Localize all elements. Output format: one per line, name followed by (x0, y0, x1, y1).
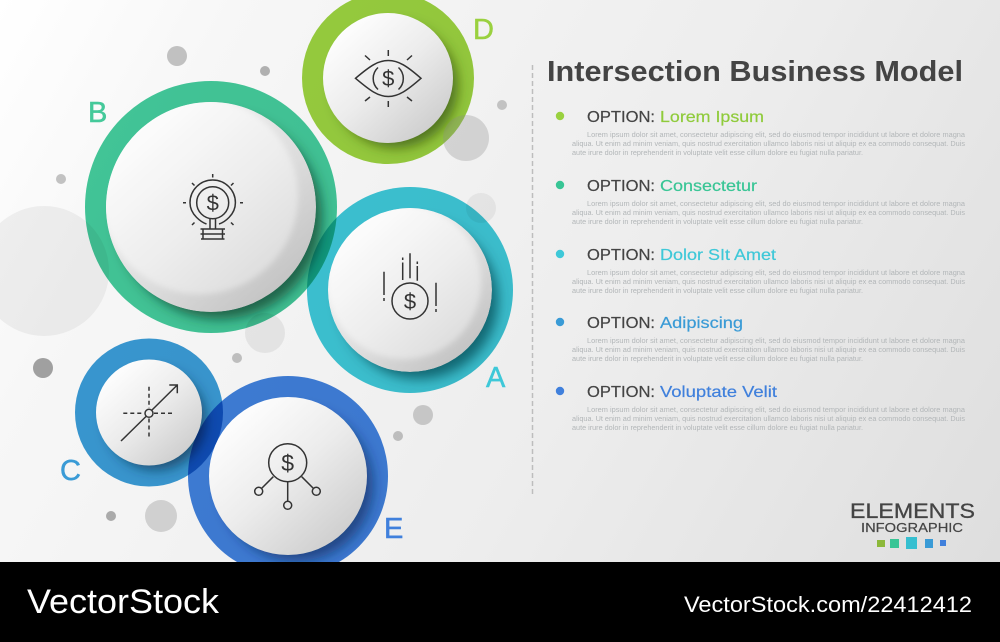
ring B (85, 81, 337, 333)
option: Voluptate Velit (556, 384, 966, 432)
option: Voluptate Velit: Lorem ipsum dolor sit amet, consectetur adipiscing elit, sed do eiusmod tempor incididunt ut labore et dolore magna (587, 407, 965, 414)
panel: circle A (307, 187, 513, 393)
option: Lorem Ipsum: aute irure dolor in reprehenderit in voluptate velit esse cillum dolore eu fugiat nulla pariatur. (572, 150, 863, 157)
ring E (188, 376, 388, 576)
icon: eye with dollar: $ (382, 66, 394, 91)
panel: circle C (75, 338, 223, 486)
option: Dolor Sit Amet: aute irure dolor in reprehenderit in voluptate velit esse cillum dolore eu fugiat nulla pariatur. (572, 288, 863, 295)
letter label E: E (384, 513, 403, 545)
icon: coin network: $ (281, 450, 294, 476)
option: Consectetur: Consectetur (660, 178, 758, 195)
decorative grey dots (0, 46, 507, 532)
option: Lorem Ipsum (556, 109, 966, 157)
option: Dolor Sit Amet: OPTION: (587, 247, 655, 264)
dashed divider (532, 65, 534, 497)
option: Consectetur: Lorem ipsum dolor sit amet, consectetur adipiscing elit, sed do eiusmod tempor incididunt ut labore et dolore magna (587, 201, 965, 208)
disc D (323, 13, 453, 143)
footer brand: VectorStock (27, 583, 220, 621)
option: Consectetur: OPTION: (587, 178, 655, 195)
disc E (209, 397, 367, 555)
shadow E (221, 409, 373, 561)
option: Adipiscing: Adipiscing (660, 315, 743, 332)
footer bar (0, 562, 1000, 642)
option: Lorem Ipsum: Lorem Ipsum (660, 109, 764, 126)
shadow A (340, 221, 498, 379)
panel: circle B (85, 81, 337, 333)
option: Adipiscing: OPTION: (587, 315, 655, 332)
option: Consectetur: aute irure dolor in reprehenderit in voluptate velit esse cillum dolore eu fugiat nulla pariatur. (572, 219, 863, 226)
option: Lorem Ipsum: aliqua. Ut enim ad minim veniam, quis nostrud exercitation ullamco laboris nisi ut aliquip ex ea commodo consequat. Duis (572, 141, 966, 148)
shadow C (106, 370, 206, 470)
disc A (327, 205, 492, 372)
logo: Elements Infographic: INFOGRAPHIC (861, 520, 963, 535)
letter label B: B (88, 97, 107, 129)
disc B (102, 98, 316, 312)
logo: Elements Infographic (850, 500, 975, 549)
option: Adipiscing: aliqua. Ut enim ad minim veniam, quis nostrud exercitation ullamco laboris nisi ut aliquip ex ea commodo consequat. Duis (572, 347, 966, 354)
option: Voluptate Velit: Voluptate Velit (660, 384, 778, 401)
option: Voluptate Velit: aliqua. Ut enim ad minim veniam, quis nostrud exercitation ullamco laboris nisi ut aliquip ex ea commodo consequat. Duis (572, 416, 966, 423)
panel: circle E (188, 376, 388, 576)
letter label A: A (486, 362, 506, 394)
option: Lorem Ipsum: OPTION: (587, 109, 655, 126)
icon: light bulb with dollar: $ (207, 190, 219, 216)
shadow D (334, 24, 458, 148)
ring C (75, 338, 223, 486)
option: Consectetur: aliqua. Ut enim ad minim veniam, quis nostrud exercitation ullamco laboris nisi ut aliquip ex ea commodo consequat. Duis (572, 210, 966, 217)
disc C (96, 360, 202, 466)
option: Voluptate Velit: aute irure dolor in reprehenderit in voluptate velit esse cillum dolore eu fugiat nulla pariatur. (572, 425, 863, 432)
option: Adipiscing (556, 315, 966, 363)
option: Consectetur (556, 178, 966, 226)
option: Dolor Sit Amet: aliqua. Ut enim ad minim veniam, quis nostrud exercitation ullamco laboris nisi ut aliquip ex ea commodo consequat. Duis (572, 279, 966, 286)
option: Lorem Ipsum: Lorem ipsum dolor sit amet, consectetur adipiscing elit, sed do eiusmod tempor incididunt ut labore et dolore magna (587, 132, 965, 139)
logo: Elements Infographic: ELEMENTS (850, 500, 975, 523)
icon: coin network (255, 444, 320, 509)
option: Adipiscing: Lorem ipsum dolor sit amet, consectetur adipiscing elit, sed do eiusmod tempor incididunt ut labore et dolore magna (587, 338, 965, 345)
icon: light bulb with dollar (183, 174, 243, 239)
letter label D: D (473, 14, 494, 46)
footer image id: VectorStock.com/22412412 (684, 592, 972, 617)
panel: circle D (302, 0, 474, 164)
icon: falling coin (384, 253, 436, 319)
option: Dolor Sit Amet: Lorem ipsum dolor sit amet, consectetur adipiscing elit, sed do eiusmod tempor incididunt ut labore et dolore magna (587, 270, 965, 277)
option: Dolor Sit Amet: Dolor SIt Amet (660, 247, 777, 264)
icon: eye with dollar (356, 50, 421, 107)
option: Voluptate Velit: OPTION: (587, 384, 655, 401)
option: Adipiscing: aute irure dolor in reprehenderit in voluptate velit esse cillum dolore eu fugiat nulla pariatur. (572, 356, 863, 363)
ring A (307, 187, 513, 393)
shadow B (118, 115, 322, 319)
title: Intersection Business Model (547, 56, 963, 88)
icon: falling coin: $ (404, 289, 416, 314)
option: Dolor Sit Amet (556, 247, 966, 295)
icon: crosshair with rising arrow (121, 385, 177, 441)
ring D (302, 0, 474, 164)
letter label C: C (60, 455, 81, 487)
grey dot over green ring (443, 115, 489, 161)
